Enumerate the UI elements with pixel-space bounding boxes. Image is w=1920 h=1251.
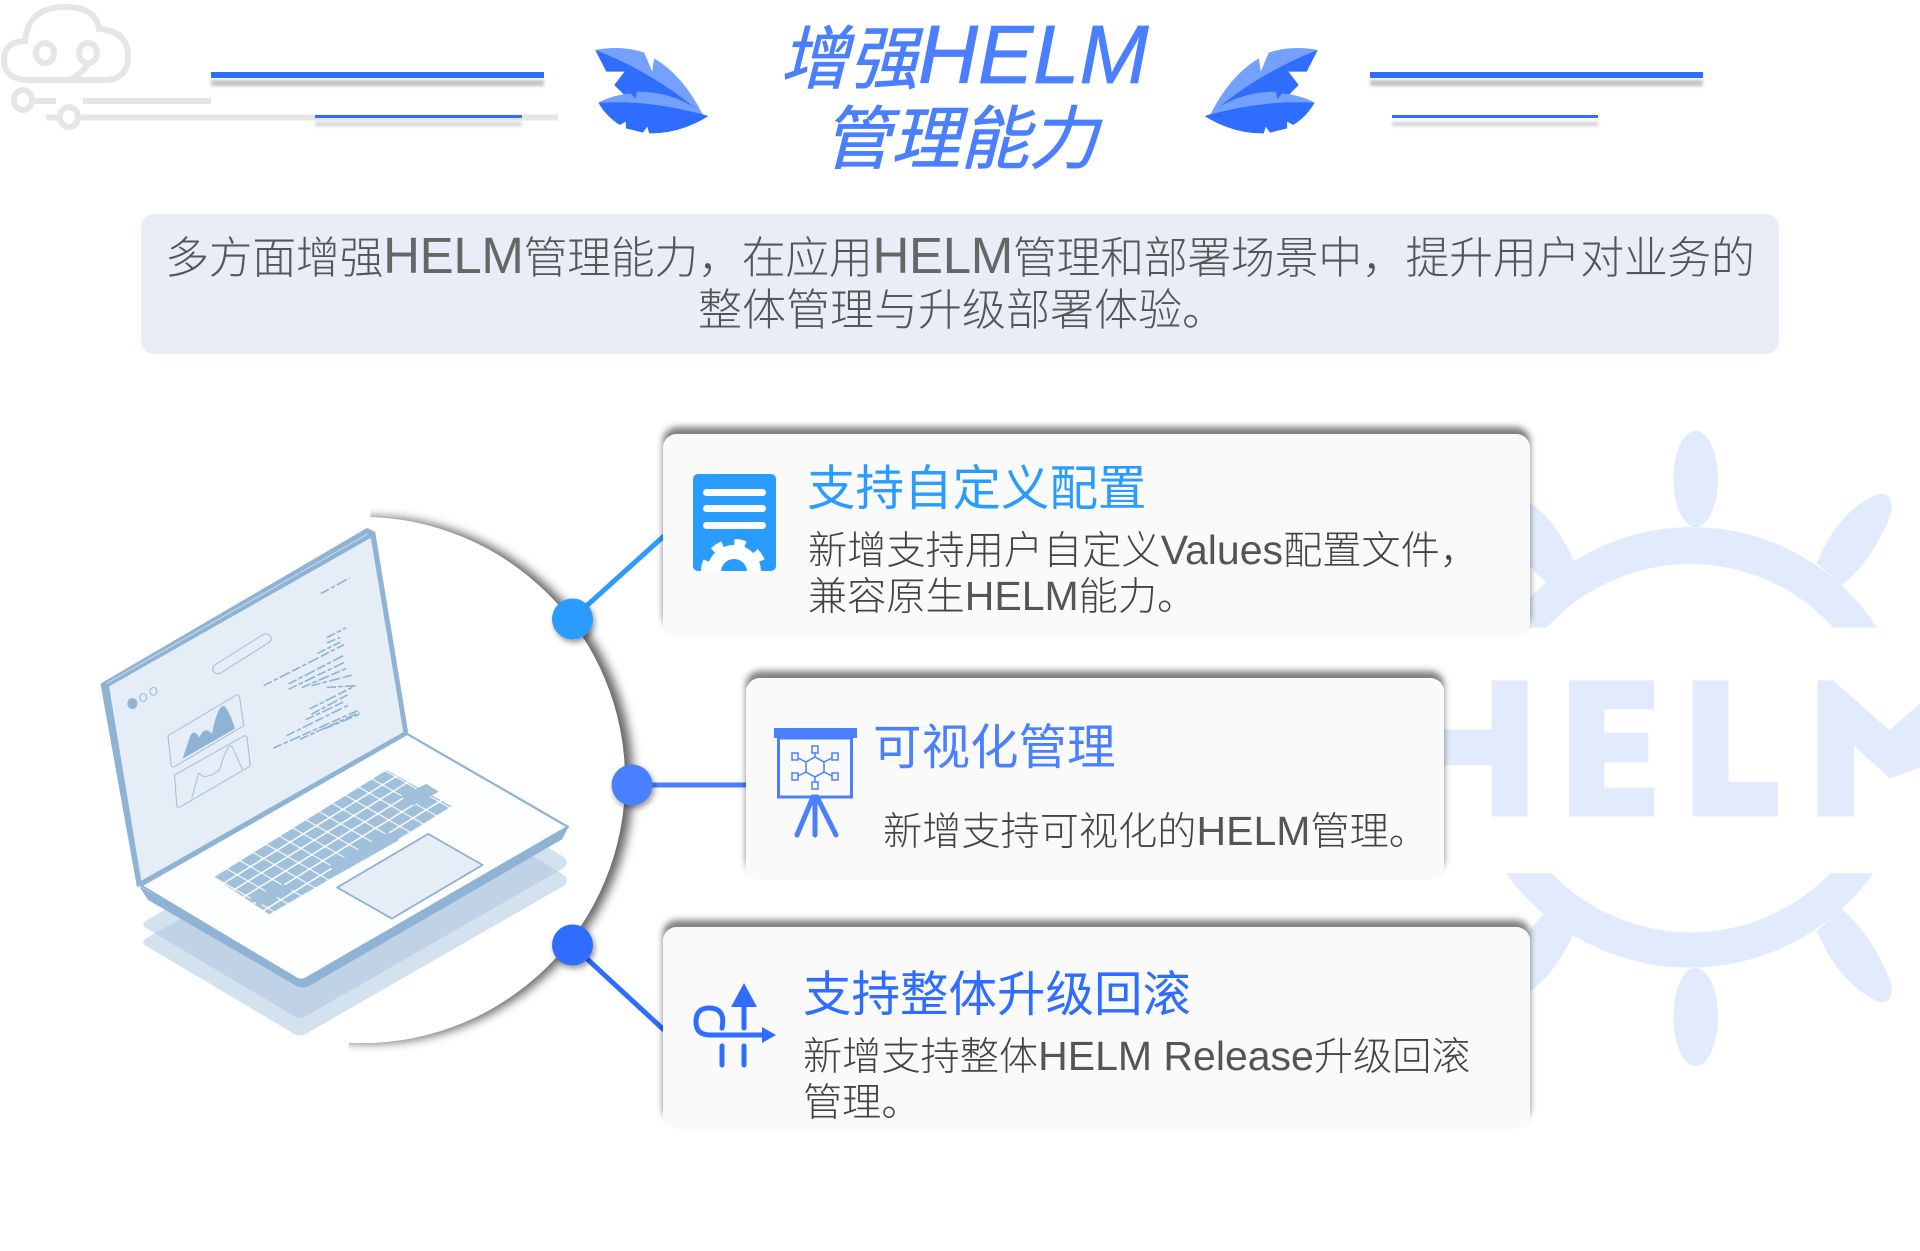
laptop base — [139, 826, 569, 987]
icon: right leaf — [1204, 48, 1318, 133]
title: 管理能力 — [822, 101, 1103, 178]
panel: description: 多方面增强HELM管理能力，在应用HELM管理和部署场景中，提升用户对业务的 — [165, 227, 1755, 284]
trackpad — [337, 834, 483, 919]
panel: card 2 visual management: 可视化管理 — [873, 721, 1116, 775]
title: 增强HELM — [780, 8, 1149, 101]
title — [780, 8, 1149, 178]
panel: card 1 custom config: 支持自定义配置 — [807, 462, 1147, 516]
panel: card 2 visual management: 新增支持可视化的HELM管理。 — [883, 808, 1428, 854]
left header lines — [211, 72, 544, 126]
screen charts — [168, 695, 250, 808]
keyboard — [213, 770, 453, 914]
icon: upgrade rollback arrows — [696, 983, 776, 1065]
background cloud decoration — [4, 7, 558, 127]
search pill — [218, 639, 266, 669]
right header lines — [1370, 72, 1703, 126]
panel: description — [141, 214, 1779, 354]
screen dots — [128, 687, 157, 709]
panel: card 1 custom config — [663, 434, 1530, 636]
panel: card 3 upgrade rollback — [663, 927, 1530, 1129]
laptop illustration — [101, 529, 569, 1036]
screen text lines — [264, 578, 359, 748]
panel: card 3 upgrade rollback: 新增支持整体HELM Release升级回滚 — [803, 1033, 1471, 1079]
panel: card 2 visual management — [746, 678, 1444, 880]
HELM wheel watermark — [1397, 431, 1920, 1066]
laptop shadow layers — [143, 768, 567, 1036]
laptop screen — [101, 529, 408, 886]
panel: description: 整体管理与升级部署体验。 — [698, 286, 1226, 335]
icon: left leaf — [595, 48, 709, 133]
panel: card 3 upgrade rollback: 支持整体升级回滚 — [803, 968, 1191, 1022]
connector dots — [552, 598, 652, 966]
panel: card 1 custom config: 新增支持用户自定义Values配置文件， — [808, 527, 1479, 573]
icon: presentation board — [774, 728, 857, 835]
panel: card 1 custom config: 兼容原生HELM能力。 — [808, 573, 1196, 619]
large white circle — [348, 510, 640, 1050]
connector lines — [572, 536, 748, 1030]
icon: config document — [693, 474, 776, 571]
panel: card 3 upgrade rollback: 管理。 — [803, 1082, 921, 1125]
